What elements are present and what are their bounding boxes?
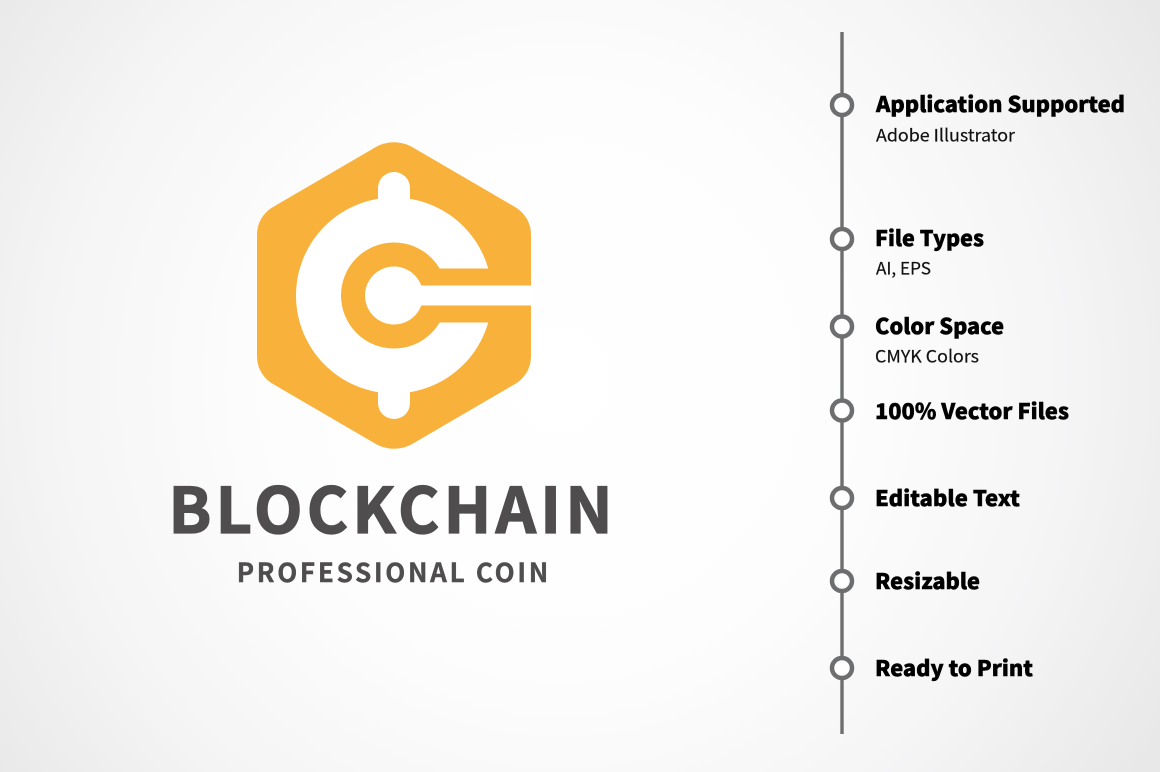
timeline line [840,32,844,734]
timeline node 1 [832,95,852,115]
heading: Color Space: Color Space [875,310,1004,341]
heading: File Types: File Types [875,222,984,253]
timeline node 2 [832,229,852,249]
timeline node 5 [832,488,852,508]
timeline node 6 [832,571,852,591]
timeline node 4 [832,400,852,420]
text: CMYK Colors: CMYK Colors [875,342,979,368]
text: Adobe Illustrator: Adobe Illustrator [876,122,1015,146]
text: AI, EPS: AI, EPS [876,254,931,280]
heading: Editable Text: Editable Text [875,482,1020,513]
title: BLOCKCHAIN: BLOCKCHAIN [168,461,612,552]
heading: Resizable: Resizable [875,565,980,596]
subtitle: PROFESSIONAL COIN: PROFESSIONAL COIN [237,553,548,590]
heading: Application Supported: Application Supported [875,88,1125,119]
icon: hexagon coin logo [257,142,532,449]
heading: Ready to Print: Ready to Print [875,652,1033,683]
timeline node 3 [832,316,852,336]
heading: 100% Vector Files: 100% Vector Files [875,395,1069,426]
timeline node 7 [832,658,852,678]
